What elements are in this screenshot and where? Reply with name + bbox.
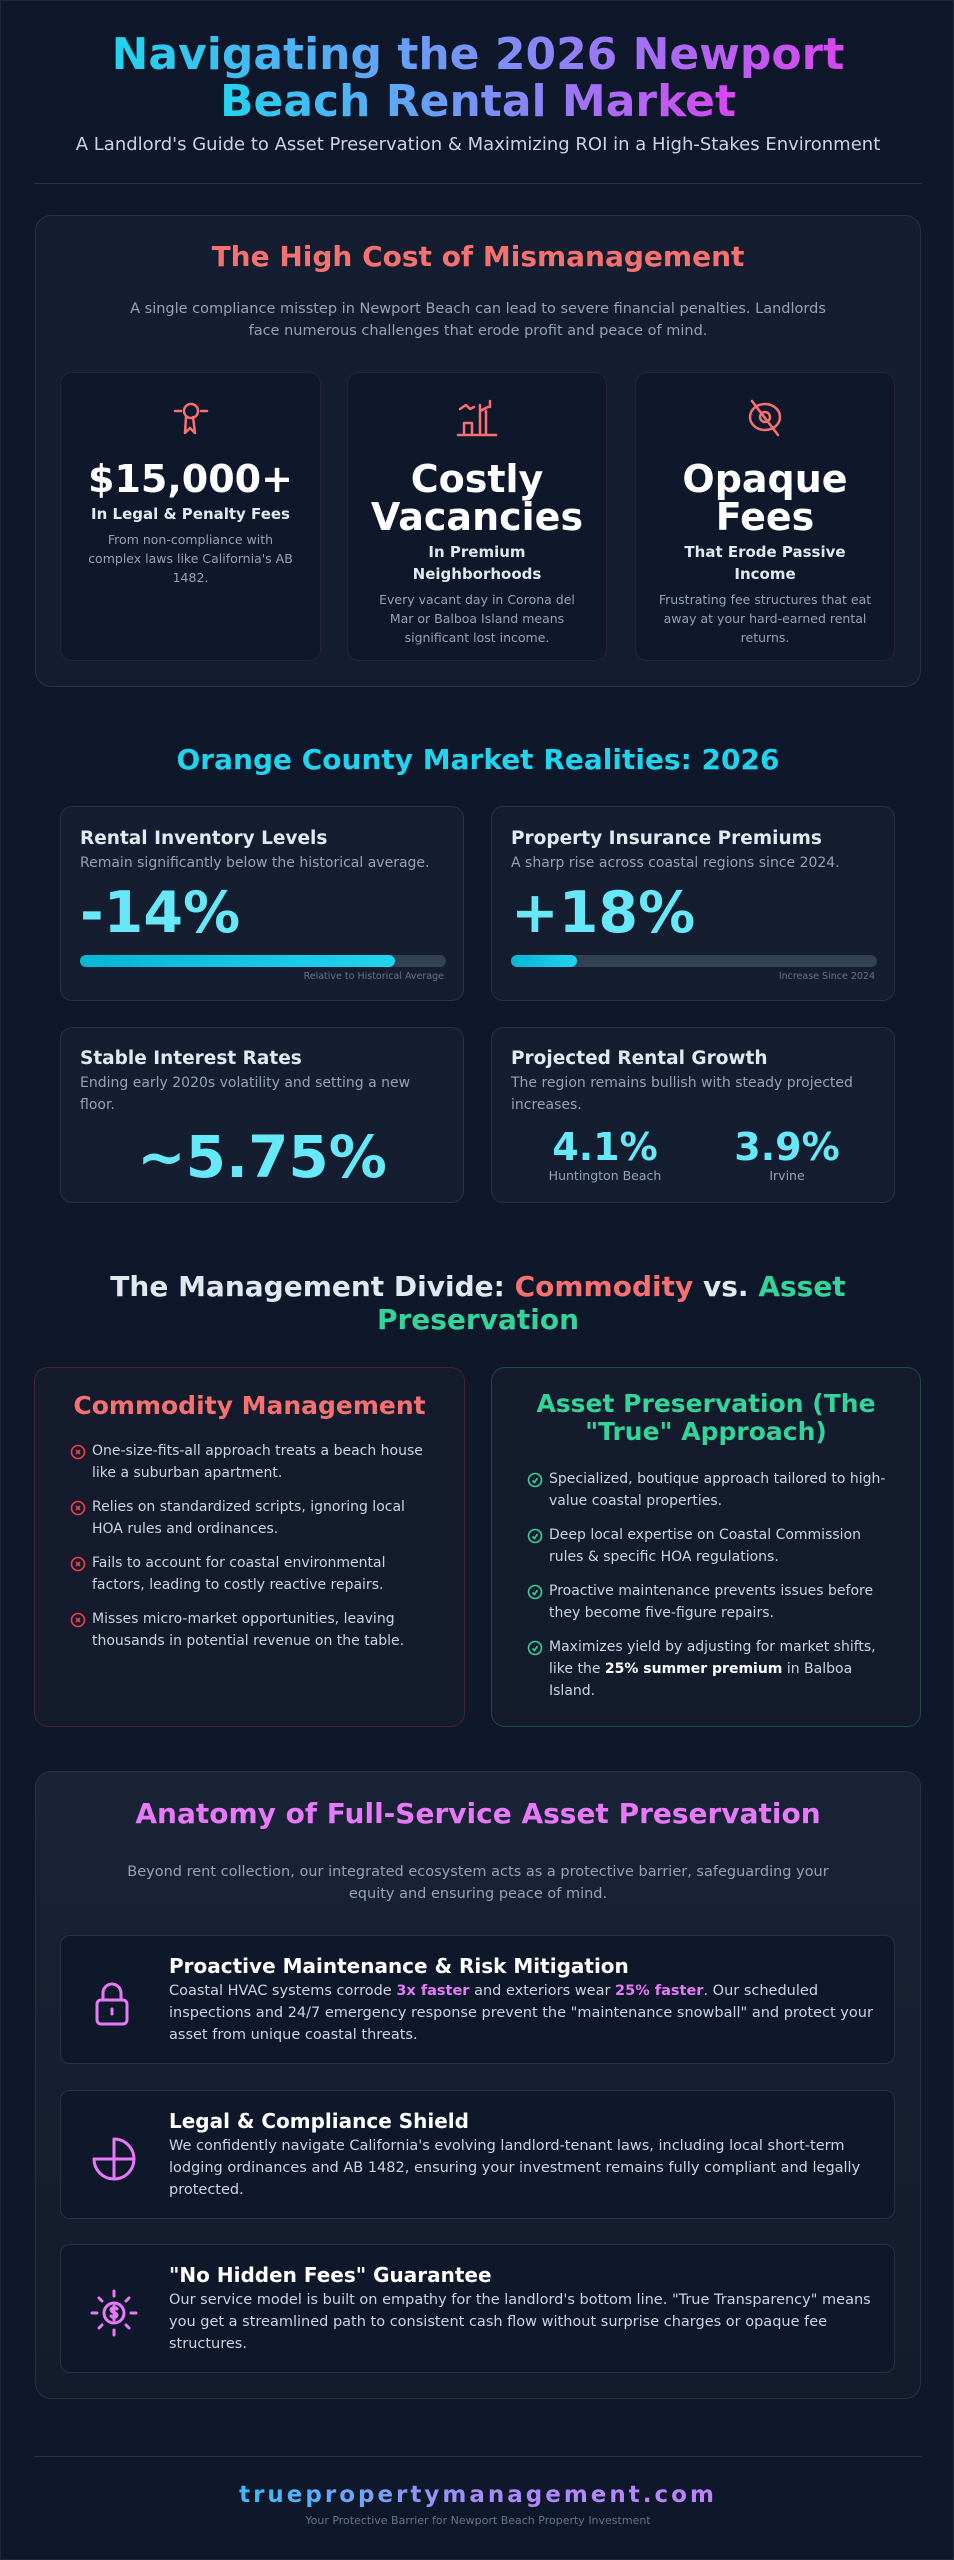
stat: opaque fees: Opaque xyxy=(682,457,848,501)
card: rental growth: Projected Rental Growth xyxy=(511,1048,768,1069)
card: penalty fees: From non-compliance with complex laws like California's AB 1482. xyxy=(88,532,293,585)
title xyxy=(112,29,844,127)
card: insurance premiums xyxy=(491,806,895,1001)
heading: management divide: The Management Divide: Commodity vs. Asset xyxy=(110,1270,846,1303)
card: insurance premiums: Property Insurance Premiums xyxy=(511,828,822,849)
card: rental inventory xyxy=(60,806,464,1001)
feature: no hidden fees: Our service model is built on empathy for the landlord's bottom line. "True Transparency" means you get a streamlined path to consistent cash flow without surprise charges or opaque fee structures. xyxy=(169,2292,871,2352)
card: rental inventory: Remain significantly below the historical average. xyxy=(80,855,429,871)
card: interest rates: Ending early 2020s volatility and setting a new floor. xyxy=(80,1075,410,1113)
card: rental inventory: Relative to Historical Average xyxy=(304,971,444,982)
card: opaque fees: That Erode Passive Income xyxy=(684,543,846,583)
card: rental growth xyxy=(491,1027,895,1203)
card: interest rates xyxy=(60,1027,464,1203)
icon: award ribbon xyxy=(174,402,208,434)
panel: high cost of mismanagement xyxy=(35,215,921,687)
stat: opaque fees xyxy=(682,457,848,539)
list: asset benefits: Specialized, boutique approach tailored to high-value coastal properties. xyxy=(549,1471,885,1509)
feature: no hidden fees xyxy=(60,2244,895,2373)
stat: huntington beach: Huntington Beach xyxy=(549,1168,661,1183)
subtitle: A Landlord's Guide to Asset Preservation & Maximizing ROI in a High-Stakes Environment xyxy=(76,134,880,155)
list: commodity drawbacks: Fails to account for coastal environmental factors, leading to costly reactive repairs. xyxy=(92,1555,385,1593)
list: commodity drawbacks: Misses micro-market opportunities, leaving thousands in potential revenue on the table. xyxy=(92,1611,404,1649)
icon: eye off xyxy=(748,400,782,436)
feature: legal shield xyxy=(60,2090,895,2219)
heading: anatomy: Anatomy of Full-Service Asset Preservation xyxy=(135,1797,821,1830)
stat: -14%: -14% xyxy=(80,880,240,946)
title: Beach Rental Market xyxy=(220,76,736,127)
heading: asset preservation: "True" Approach) xyxy=(585,1417,827,1446)
stat: costly vacancies: Costly xyxy=(411,457,543,501)
title: Navigating the 2026 Newport xyxy=(112,29,844,80)
stat: irvine: Irvine xyxy=(769,1168,805,1183)
card: insurance premiums: Increase Since 2024 xyxy=(779,971,875,982)
feature: proactive maintenance: Coastal HVAC systems corrode 3x faster and exteriors wear 25% faster. Our scheduled inspections and 24/7 emergency response prevent the "maintenance snowball" and protect your asset from unique coastal threats. xyxy=(169,1983,873,2043)
icon: dollar sun xyxy=(90,2290,138,2336)
card: opaque fees: Frustrating fee structures that eat away at your hard-earned rental returns. xyxy=(659,592,871,645)
feature: no hidden fees: "No Hidden Fees" Guarantee xyxy=(169,2263,492,2287)
intro text: A single compliance misstep in Newport Beach can lead to severe financial penalties. Landlords face numerous challenges that erode profit and peace of mind. xyxy=(130,301,826,339)
feature: legal shield: Legal & Compliance Shield xyxy=(169,2109,469,2133)
heading: asset preservation: Asset Preservation (The xyxy=(536,1389,876,1418)
list: commodity drawbacks: Relies on standardized scripts, ignoring local HOA rules and ordinances. xyxy=(92,1499,405,1537)
icon: lock xyxy=(96,1982,128,2026)
card: costly vacancies: Every vacant day in Corona del Mar or Balboa Island means significant lost income. xyxy=(379,592,575,645)
stat: irvine: 3.9% xyxy=(734,1125,840,1169)
list: asset benefits: Maximizes yield by adjusting for market shifts, like the 25% summer premium in Balboa Island. xyxy=(549,1639,876,1699)
card: penalty fees: In Legal & Penalty Fees xyxy=(91,505,290,523)
bar: insurance xyxy=(511,955,877,967)
list: asset benefits xyxy=(528,1471,885,1699)
stat: costly vacancies xyxy=(371,457,583,539)
feature: legal shield: We confidently navigate California's evolving landlord-tenant laws, including local short-term lodging ordinances and AB 1482, ensuring your investment remains fully compliant and legally protected. xyxy=(169,2138,860,2198)
stat: $15,000+: $15,000+ xyxy=(88,457,293,501)
heading: market realities: Orange County Market Realities: 2026 xyxy=(176,743,779,776)
stat: costly vacancies: Vacancies xyxy=(371,495,583,539)
card: penalty fees xyxy=(60,372,321,661)
stat: 5.75%: ~5.75% xyxy=(137,1123,387,1191)
footer: domain: truepropertymanagement.com xyxy=(239,2482,717,2508)
card: rental growth: The region remains bullish with steady projected increases. xyxy=(511,1075,853,1113)
icon: shield pie xyxy=(92,2138,136,2180)
bar: inventory xyxy=(80,955,446,967)
list: asset benefits: Proactive maintenance prevents issues before they become five-figure repairs. xyxy=(549,1583,873,1621)
card: costly vacancies: In Premium Neighborhoods xyxy=(413,543,541,583)
feature: proactive maintenance: Proactive Maintenance & Risk Mitigation xyxy=(169,1954,629,1978)
feature: proactive maintenance xyxy=(60,1935,895,2064)
panel: anatomy of full-service xyxy=(35,1771,921,2399)
list: asset benefits: Deep local expertise on Coastal Commission rules & specific HOA regulations. xyxy=(549,1527,861,1565)
stat: opaque fees: Fees xyxy=(716,495,814,539)
footer: tagline: Your Protective Barrier for Newport Beach Property Investment xyxy=(305,2514,651,2527)
heading: management divide: Preservation xyxy=(377,1303,579,1336)
heading: commodity: Commodity Management xyxy=(73,1391,426,1420)
stat: +18%: +18% xyxy=(511,880,695,946)
card: costly vacancies xyxy=(347,372,607,661)
card: insurance premiums: A sharp rise across coastal regions since 2024. xyxy=(511,855,840,871)
stat: huntington beach: 4.1% xyxy=(552,1125,658,1169)
panel: commodity management xyxy=(34,1367,465,1727)
icon: vacant building xyxy=(456,400,498,436)
panel: asset preservation xyxy=(491,1367,921,1727)
heading: management divide xyxy=(110,1270,846,1336)
heading: high cost: The High Cost of Mismanagement xyxy=(212,240,744,273)
card: rental inventory: Rental Inventory Levels xyxy=(80,828,327,849)
card: interest rates: Stable Interest Rates xyxy=(80,1048,302,1069)
heading: asset preservation xyxy=(536,1389,876,1446)
list: commodity drawbacks: One-size-fits-all approach treats a beach house like a suburban apartment. xyxy=(92,1443,423,1481)
card: opaque fees xyxy=(635,372,895,661)
intro text: Beyond rent collection, our integrated ecosystem acts as a protective barrier, safeguarding your equity and ensuring peace of mind. xyxy=(127,1864,829,1902)
list: commodity drawbacks xyxy=(70,1443,423,1649)
